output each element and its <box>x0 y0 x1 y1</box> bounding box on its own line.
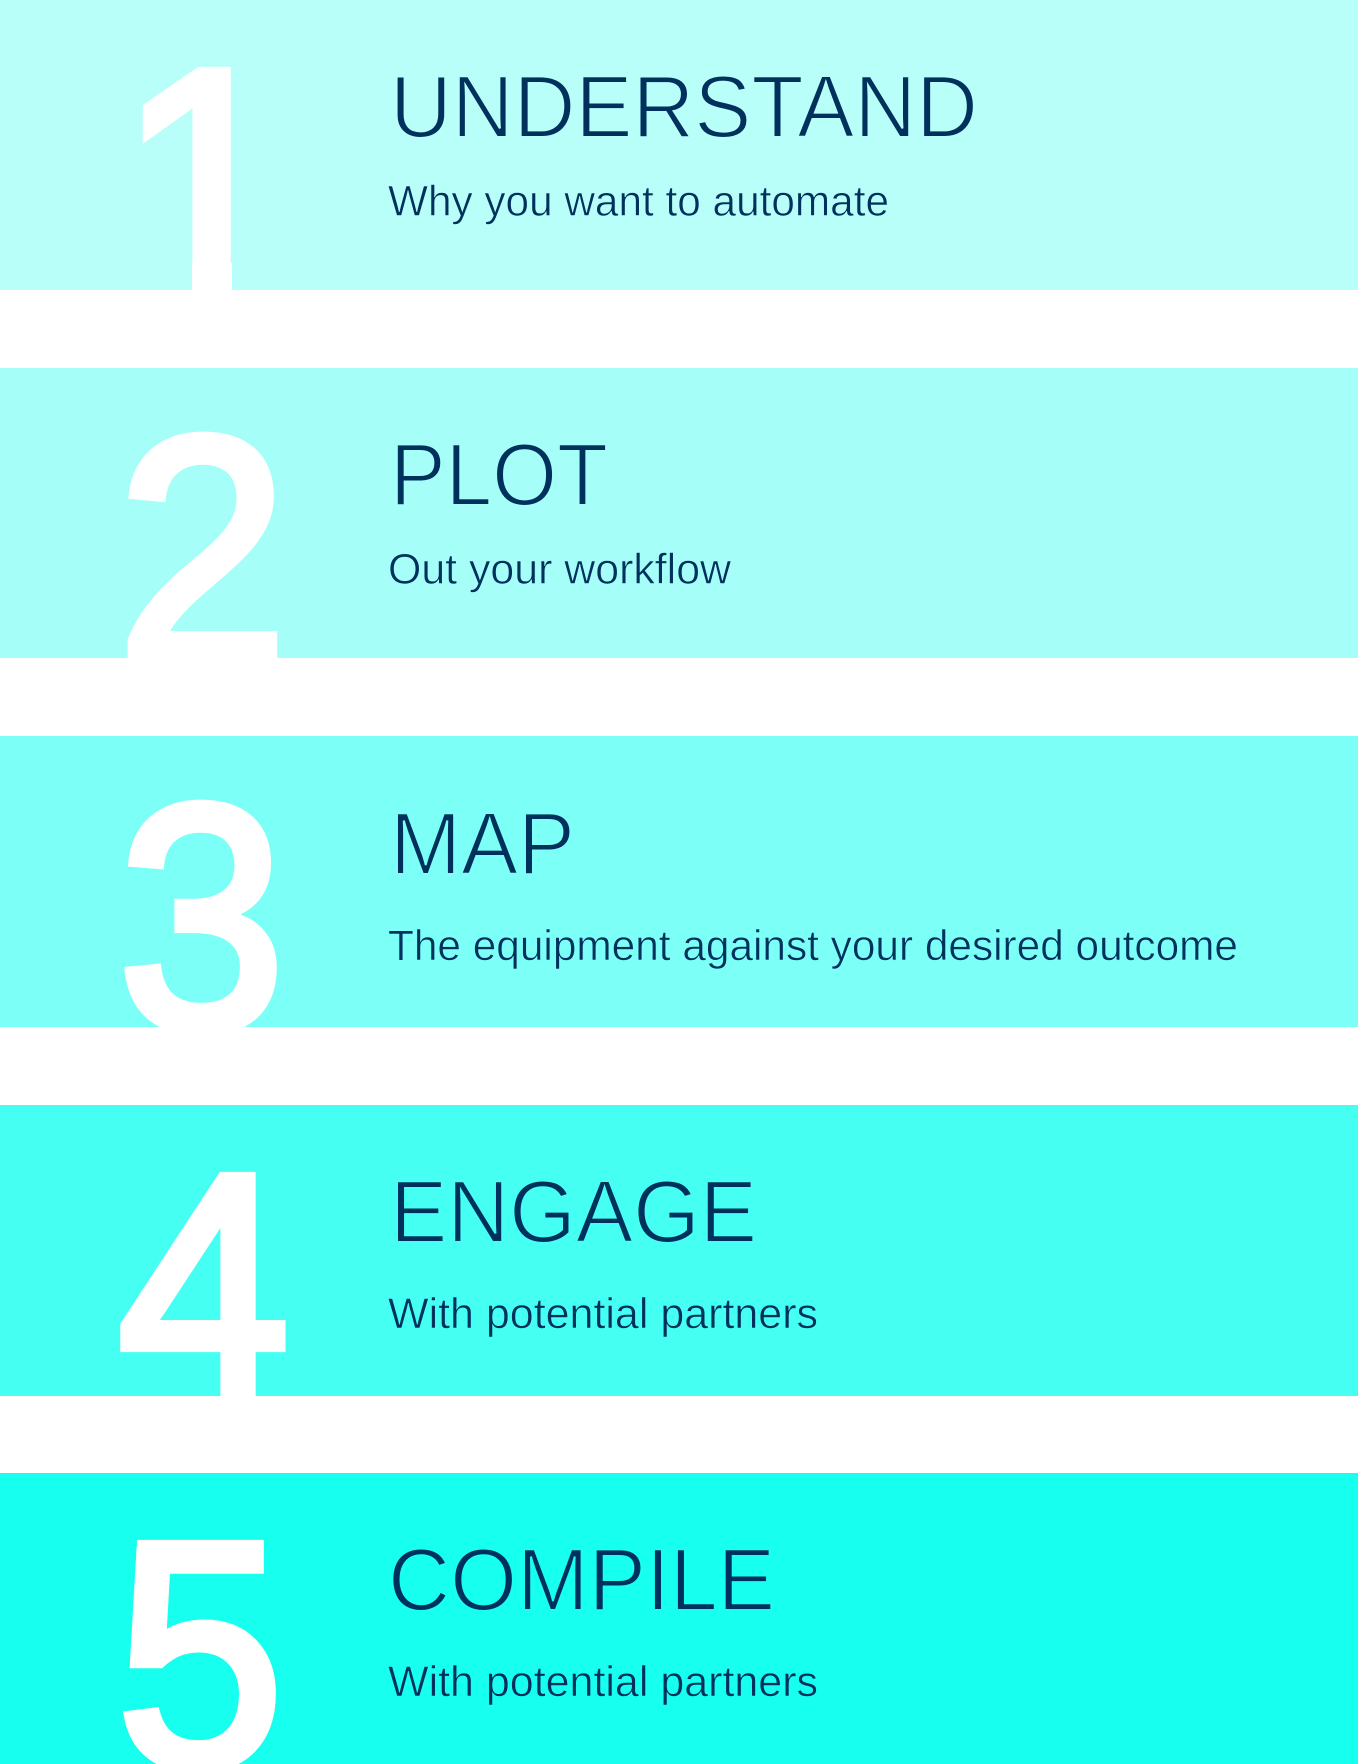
panel: step 2 plot <box>0 368 1358 728</box>
heading: plot: PLOT <box>390 425 608 524</box>
number 1: 1 <box>117 2 295 360</box>
heading: understand: UNDERSTAND <box>390 57 978 156</box>
number 3: 3 <box>118 738 285 1096</box>
panel: step 5 compile <box>0 1473 1358 1764</box>
heading: engage: ENGAGE <box>390 1162 757 1261</box>
panel: step 4 engage <box>0 1105 1358 1465</box>
panel: step 1 understand <box>0 0 1358 290</box>
text: why you want to automate: Why you want to automate <box>388 178 889 226</box>
text: with potential partners: With potential partners <box>388 1659 818 1706</box>
heading: compile: COMPILE <box>388 1530 775 1629</box>
panel: step 3 map <box>0 736 1358 1096</box>
text: out your workflow: Out your workflow <box>388 546 731 594</box>
heading: map: MAP <box>390 794 575 893</box>
text: with potential partners: With potential partners <box>388 1291 818 1338</box>
text: the equipment against your desired outcome: The equipment against your desired outcome <box>388 923 1238 970</box>
number 4: 4 <box>118 1107 290 1465</box>
number 2: 2 <box>117 371 288 728</box>
